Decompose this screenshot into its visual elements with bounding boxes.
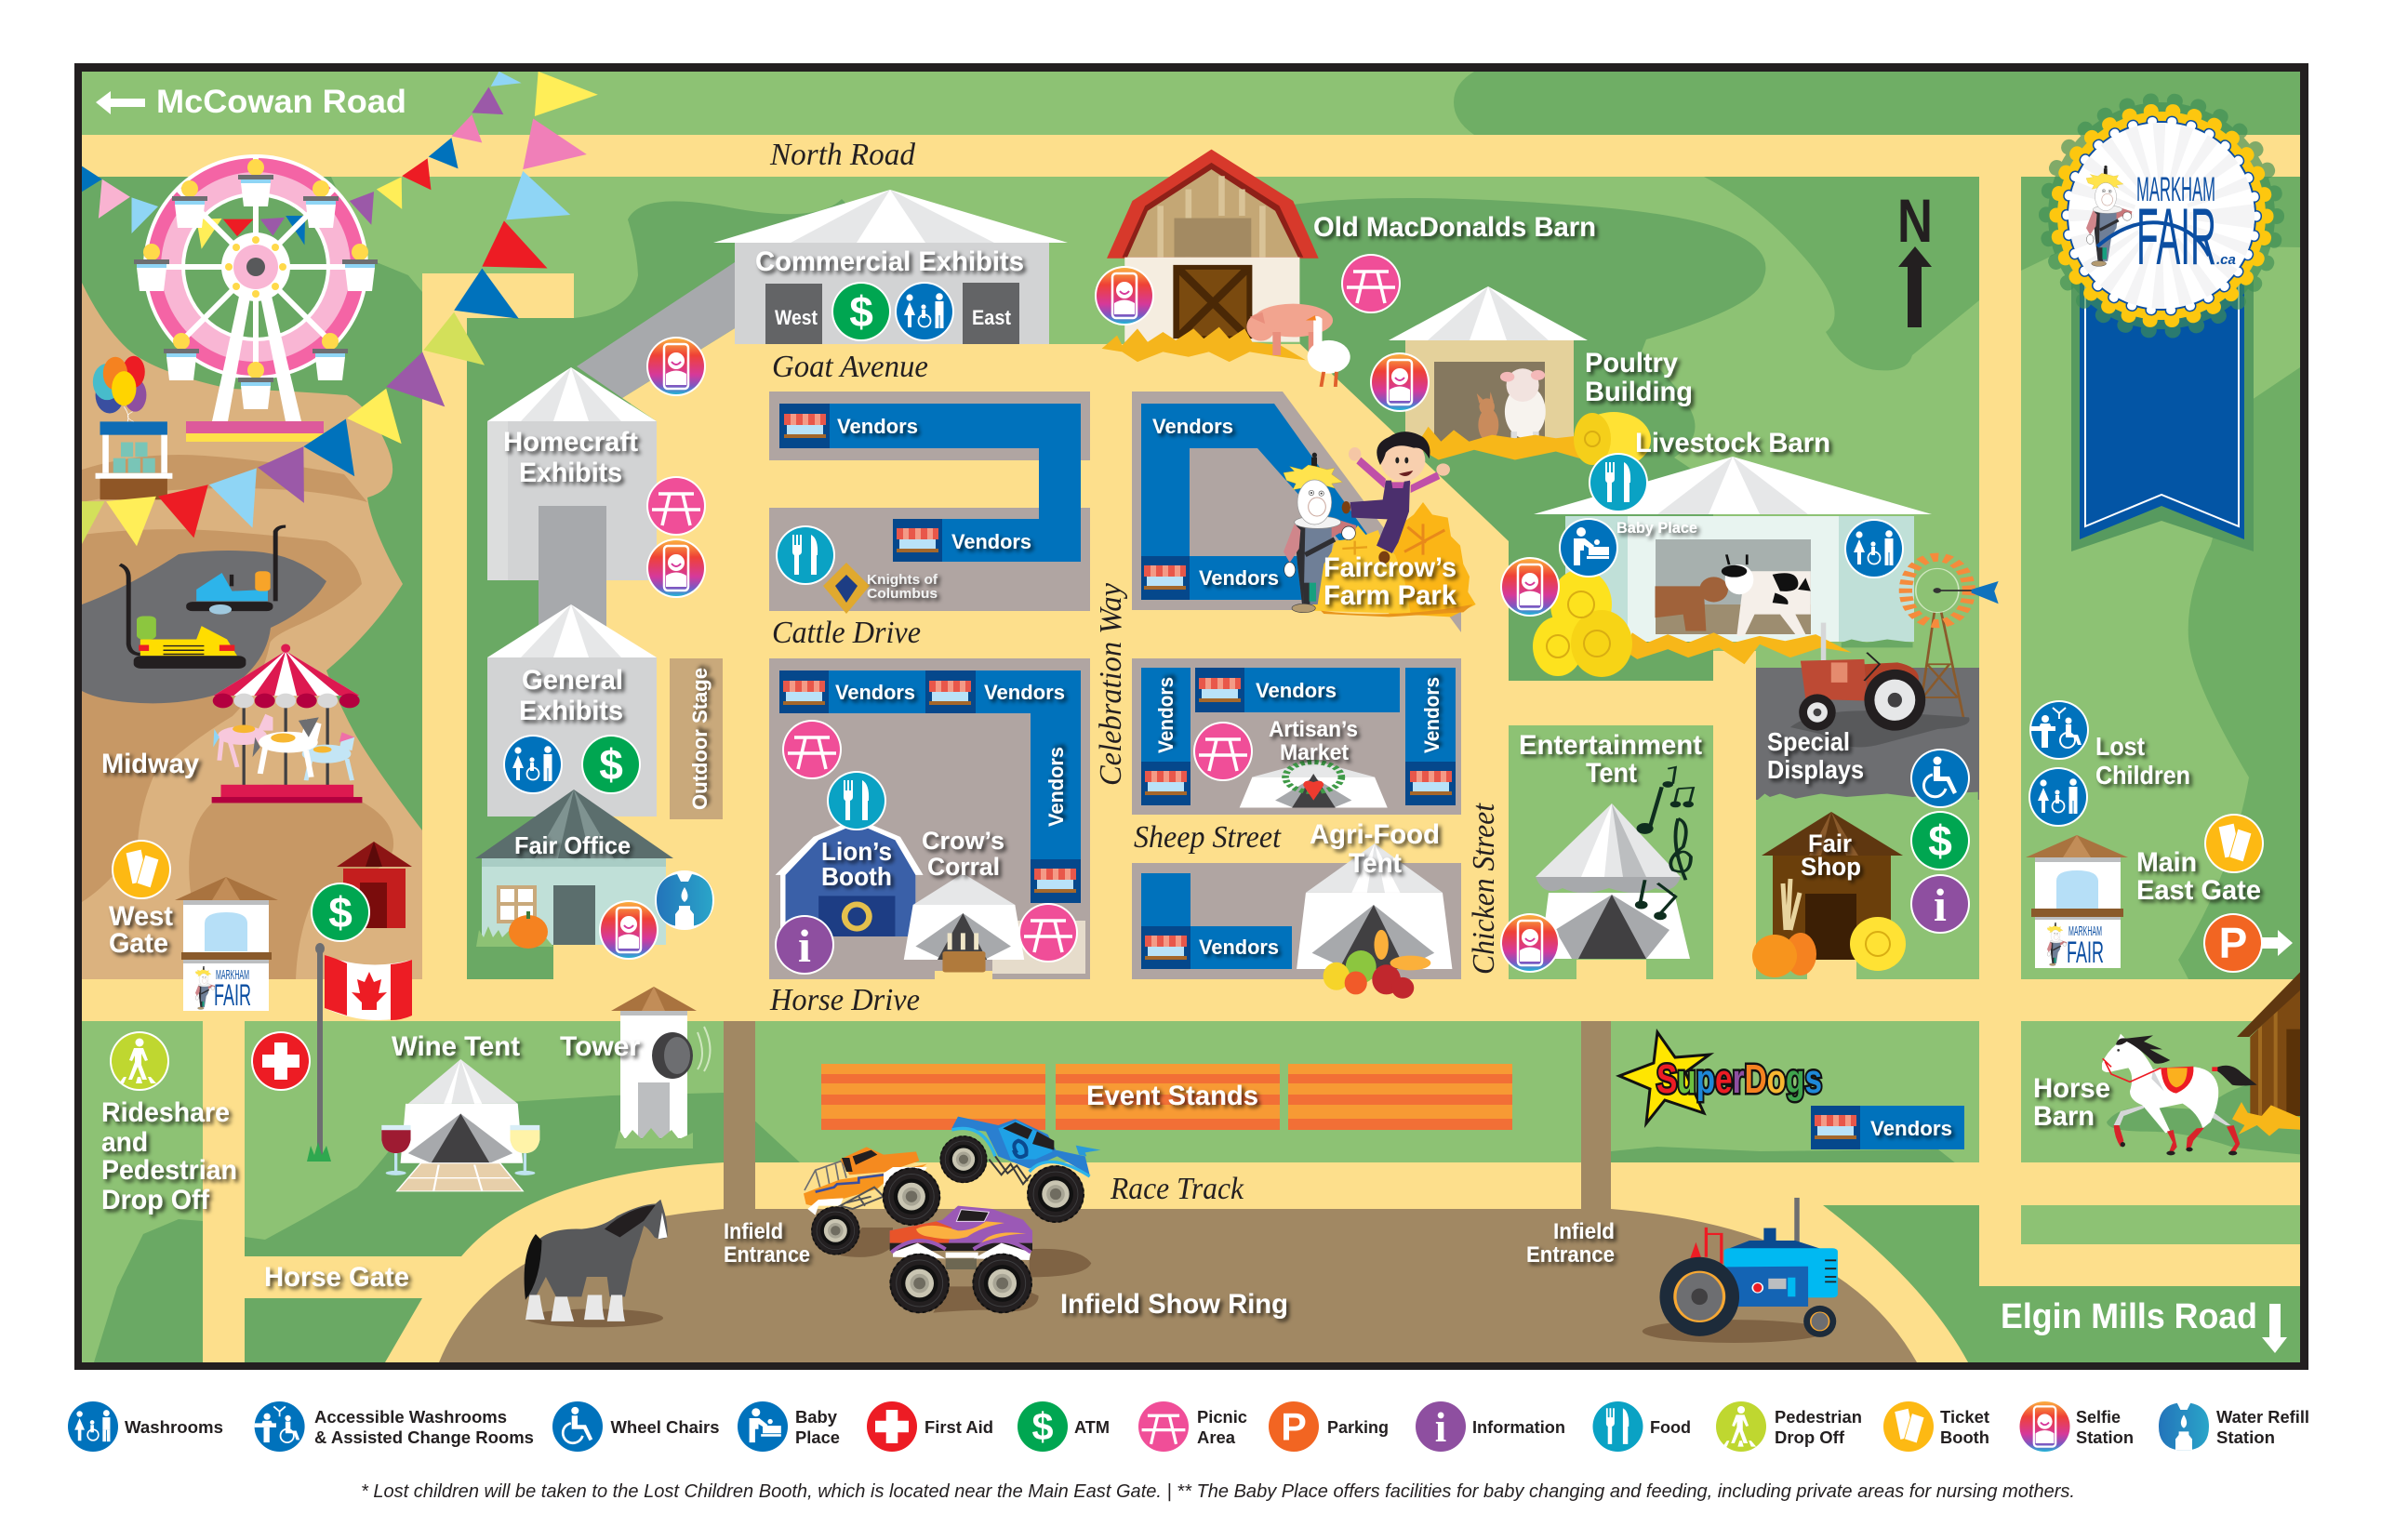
elgin mills road sign <box>2001 1297 2287 1353</box>
vendor block superdogs <box>1811 1106 1964 1149</box>
legend: atm <box>1018 1401 1110 1452</box>
legend: baby place: Baby <box>795 1408 837 1427</box>
legend: accessible washrooms <box>255 1401 534 1452</box>
white horse <box>253 717 322 777</box>
west gate building <box>175 877 278 1012</box>
legend: atm: $ <box>1031 1405 1054 1448</box>
legend: water refill station: Station <box>2216 1428 2275 1447</box>
venue labels: Infield Show Ring <box>1060 1289 1288 1320</box>
map frame <box>74 63 2308 1370</box>
poultry building <box>1389 286 1590 461</box>
event stands <box>821 1064 1512 1130</box>
footnote: * Lost children will be taken to the Lost Children Booth, which is located near the Main East Gate. | ** The Baby Place offers facilities for baby changing and feeding, including private areas for nursing mothers. <box>361 1481 2075 1502</box>
red shed <box>337 842 412 928</box>
road names: Horse Drive <box>769 983 920 1017</box>
road names <box>769 138 1501 1206</box>
knights of columbus crest <box>823 563 870 614</box>
venue labels: Farm Park <box>1324 580 1457 611</box>
homecraft exhibits building <box>487 367 657 627</box>
east gate sign: FAIR <box>2067 936 2104 969</box>
venue labels: Old MacDonalds Barn <box>1313 212 1596 243</box>
venue labels: West <box>109 901 173 932</box>
venue labels: Gate <box>109 928 168 959</box>
goose <box>1306 315 1350 387</box>
grass background <box>82 72 2300 1362</box>
vendor labels: Vendors <box>951 530 1031 553</box>
brown cow <box>1656 577 1728 631</box>
legend: ticket booth: Ticket <box>1940 1408 1989 1427</box>
vendor labels <box>835 415 1952 1140</box>
legend: picnic area: Picnic <box>1197 1408 1247 1427</box>
main east gate building <box>2026 835 2128 969</box>
markham fair ribbon: MARKHAM <box>2136 170 2215 208</box>
venue labels: General <box>522 665 623 696</box>
venue labels: Event Stands <box>1086 1081 1258 1111</box>
west gate sign: MARKHAM <box>216 967 249 983</box>
venue labels: Entrance <box>1526 1242 1615 1268</box>
venue labels: Tent <box>1349 848 1402 879</box>
vendor labels: Vendors <box>1420 677 1443 753</box>
superdogs logo <box>1619 1032 1822 1123</box>
lions booth <box>776 818 924 936</box>
venue labels: Shop <box>1801 853 1861 881</box>
road names: Cattle Drive <box>772 616 921 650</box>
venue labels: Special <box>1767 727 1850 756</box>
venue labels: Lost <box>2095 732 2145 761</box>
vendor block agri-food <box>1132 863 1461 979</box>
venue labels: Fair <box>1808 830 1852 857</box>
orange truck <box>804 1147 940 1255</box>
legend: pedestrian drop off <box>1716 1401 1862 1452</box>
livestock barn <box>1533 412 1932 677</box>
venue labels: Booth <box>821 862 892 891</box>
west gate sign: FAIR <box>214 978 251 1012</box>
commercial exhibits building <box>713 190 1068 344</box>
rabbit <box>1477 392 1498 442</box>
pig <box>1246 304 1333 355</box>
venue labels <box>101 212 2261 1320</box>
vendor labels: Vendors <box>835 681 915 704</box>
venue labels: Outdoor Stage <box>688 668 712 810</box>
legend: parking: Parking <box>1327 1418 1389 1437</box>
legend <box>68 1401 2309 1452</box>
vendor labels: Vendors <box>1199 936 1279 959</box>
legend: first aid <box>867 1401 993 1452</box>
venue labels: and <box>101 1127 148 1158</box>
venue labels: Wine Tent <box>392 1031 520 1062</box>
venue labels: Exhibits <box>519 458 622 488</box>
hay piles <box>1311 502 1476 617</box>
vendor block C <box>769 658 1090 979</box>
infield show ring ground <box>439 1021 1917 1362</box>
blue tractor <box>1643 1198 1838 1343</box>
legend: food: Food <box>1650 1418 1691 1437</box>
draft horse <box>525 1200 668 1327</box>
venue labels: Children <box>2095 761 2190 790</box>
blue bumper car <box>186 526 286 615</box>
blue horse <box>302 732 354 780</box>
site map <box>82 72 2304 1362</box>
markham fair ribbon <box>2046 100 2277 551</box>
white wine glass <box>511 1125 539 1175</box>
bumper cars <box>120 526 286 669</box>
vendor labels: Vendors <box>984 681 1065 704</box>
markham fair ribbon: .ca <box>2216 252 2236 268</box>
hay bales <box>1533 412 1651 677</box>
tower <box>611 987 711 1148</box>
legend: wheel chairs: Wheel Chairs <box>610 1418 720 1437</box>
ferris wheel <box>134 154 378 442</box>
venue labels: Drop Off <box>101 1185 210 1215</box>
artisans market tent <box>1240 761 1388 807</box>
vendor labels: Vendors <box>1154 677 1177 753</box>
venue labels: Infield <box>724 1219 783 1244</box>
venue labels: Baby Place <box>1616 519 1697 537</box>
yellow bumper car <box>120 564 246 669</box>
venue labels: Building <box>1585 377 1693 407</box>
produce <box>1324 930 1430 999</box>
commercial exhibits building: East <box>972 306 1012 329</box>
facility markers: $ <box>849 287 873 336</box>
horse barn and white horse <box>2102 969 2304 1155</box>
vendor labels: Vendors <box>1870 1117 1952 1140</box>
outdoor stage <box>670 658 723 819</box>
legend: information: i <box>1435 1404 1446 1451</box>
venue labels: Entrance <box>724 1242 810 1268</box>
grass lots on east side <box>1509 668 1979 979</box>
vendor block north B <box>1132 392 1461 632</box>
venue labels: Fair Office <box>514 831 631 859</box>
monster trucks <box>804 1117 1100 1313</box>
carousel <box>212 644 362 803</box>
legend: pedestrian drop off: Pedestrian <box>1775 1408 1862 1427</box>
legend: accessible washrooms: & Assisted Change Rooms <box>314 1428 534 1447</box>
legend: baby place <box>738 1401 840 1452</box>
facility markers: $ <box>328 888 352 936</box>
legend: selfie station: Selfie <box>2076 1408 2121 1427</box>
white horse <box>2102 1034 2257 1155</box>
vendor block north A <box>769 392 1090 611</box>
general exhibits building <box>487 604 657 816</box>
pink horse <box>213 714 273 767</box>
road names: Goat Avenue <box>772 350 928 384</box>
vendor labels: Vendors <box>1152 415 1233 438</box>
legend: washrooms: Washrooms <box>125 1418 223 1437</box>
road names: Race Track <box>1110 1172 1244 1206</box>
venue labels: Exhibits <box>519 696 623 726</box>
road names: Chicken Street <box>1467 803 1501 975</box>
venue labels: East Gate <box>2136 875 2261 906</box>
vendor block artisan <box>1132 658 1461 815</box>
legend: water refill station: Water Refill <box>2216 1408 2309 1427</box>
ferris cabins <box>134 159 378 409</box>
venue labels: Displays <box>1767 755 1864 784</box>
old macdonalds barn <box>1102 150 1350 387</box>
road names: Celebration Way <box>1094 582 1128 786</box>
east gate sign: MARKHAM <box>2068 923 2102 939</box>
venue labels: Homecraft <box>503 427 638 458</box>
purple truck <box>890 1206 1032 1313</box>
wine tent <box>381 1059 539 1191</box>
music notes <box>1636 767 1694 919</box>
entertainment tent <box>1536 803 1690 959</box>
elgin mills road sign: Elgin Mills Road <box>2001 1297 2257 1336</box>
midway ground <box>82 283 422 979</box>
venue labels: Horse Gate <box>264 1262 409 1293</box>
north arrow: N <box>1897 186 1933 255</box>
legend: pedestrian drop off: Drop Off <box>1775 1428 1845 1447</box>
faircrow farm park scene <box>1284 431 1476 617</box>
venue labels: Market <box>1280 740 1349 765</box>
venue labels: Artisan’s <box>1269 717 1358 742</box>
venue labels: Livestock Barn <box>1635 428 1830 458</box>
venue labels: Main <box>2136 847 2197 878</box>
facility markers: $ <box>599 740 623 789</box>
legend: selfie station <box>2020 1401 2134 1452</box>
east gate sign <box>2035 920 2121 969</box>
facility markers: i <box>798 920 811 972</box>
facility markers: i <box>1934 879 1947 931</box>
legend: parking <box>1269 1401 1389 1452</box>
legend: accessible washrooms: Accessible Washrooms <box>314 1408 507 1427</box>
legend: ticket booth <box>1883 1401 1989 1452</box>
agri-food tent <box>1297 843 1452 999</box>
facility markers: $ <box>1928 816 1952 865</box>
markham fair ribbon: FAIR <box>2136 192 2216 282</box>
superdogs logo: SuperDogs <box>1656 1056 1822 1102</box>
windmill <box>1906 557 1999 719</box>
vendor labels: Vendors <box>1199 566 1279 590</box>
venue labels: Agri-Food <box>1310 819 1440 850</box>
crows corral tent <box>904 873 1024 973</box>
vendor labels: Vendors <box>1256 679 1337 702</box>
mccowan road sign: McCowan Road <box>156 84 406 120</box>
venue labels: Horse <box>2033 1073 2110 1104</box>
facility markers <box>110 254 2293 1091</box>
holstein cow <box>1722 554 1811 636</box>
road names: North Road <box>769 138 916 172</box>
legend: picnic area <box>1138 1401 1247 1452</box>
legend: first aid: First Aid <box>924 1418 993 1437</box>
legend: food <box>1592 1401 1691 1452</box>
blue truck <box>940 1117 1100 1223</box>
legend: information <box>1416 1401 1565 1452</box>
fair office building <box>475 790 673 949</box>
venue labels: Faircrow’s <box>1324 552 1457 583</box>
venue labels: Lion’s <box>821 837 892 866</box>
road names: Sheep Street <box>1134 820 1282 855</box>
legend: parking: P <box>1281 1405 1307 1448</box>
vendor labels: Vendors <box>1044 747 1068 827</box>
legend: ticket booth: Booth <box>1940 1428 1989 1447</box>
midway booth and balloons <box>93 356 172 499</box>
sheep <box>1500 368 1546 440</box>
venue labels: Infield <box>1553 1219 1615 1244</box>
vendor labels: Vendors <box>837 415 918 438</box>
venue labels: Knights of <box>867 572 938 588</box>
red tractor <box>1757 623 1978 801</box>
legend: atm: ATM <box>1074 1418 1110 1437</box>
west gate sign <box>183 963 269 1012</box>
venue labels: Commercial Exhibits <box>755 246 1024 277</box>
venue labels: Poultry <box>1585 348 1678 378</box>
commercial exhibits building: West <box>775 306 818 329</box>
venue labels: Tent <box>1586 758 1637 789</box>
north arrow <box>1897 186 1933 327</box>
legend: picnic area: Area <box>1197 1428 1236 1447</box>
faircrow boy <box>1342 431 1450 564</box>
legend: baby place: Place <box>795 1428 840 1447</box>
fair shop <box>1752 812 1906 977</box>
facility markers: P <box>2219 919 2247 967</box>
venue labels: Tower <box>560 1031 640 1062</box>
legend: information: Information <box>1472 1418 1565 1437</box>
horse barn shed <box>2232 969 2304 1136</box>
legend: wheel chairs <box>552 1401 720 1452</box>
venue labels: Columbus <box>867 586 938 602</box>
bunting behind wheel <box>196 216 305 249</box>
venue labels: Corral <box>927 853 1000 881</box>
legend: water refill station <box>2159 1403 2309 1450</box>
gray walkway to commercial exhibits <box>577 262 735 398</box>
scarecrow <box>1284 453 1356 613</box>
legend: washrooms <box>68 1401 223 1452</box>
venue labels: Midway <box>101 749 199 779</box>
venue labels: Pedestrian <box>101 1155 237 1186</box>
venue labels: Barn <box>2033 1101 2095 1132</box>
bunting flags <box>82 72 598 546</box>
venue labels: Entertainment <box>1519 730 1702 761</box>
roads <box>82 135 2300 1362</box>
venue labels: Crow’s <box>922 827 1004 855</box>
venue labels: Rideshare <box>101 1097 230 1128</box>
canada flag on pole <box>307 943 412 1162</box>
legend: selfie station: Station <box>2076 1428 2134 1447</box>
red wine glass <box>381 1125 411 1175</box>
